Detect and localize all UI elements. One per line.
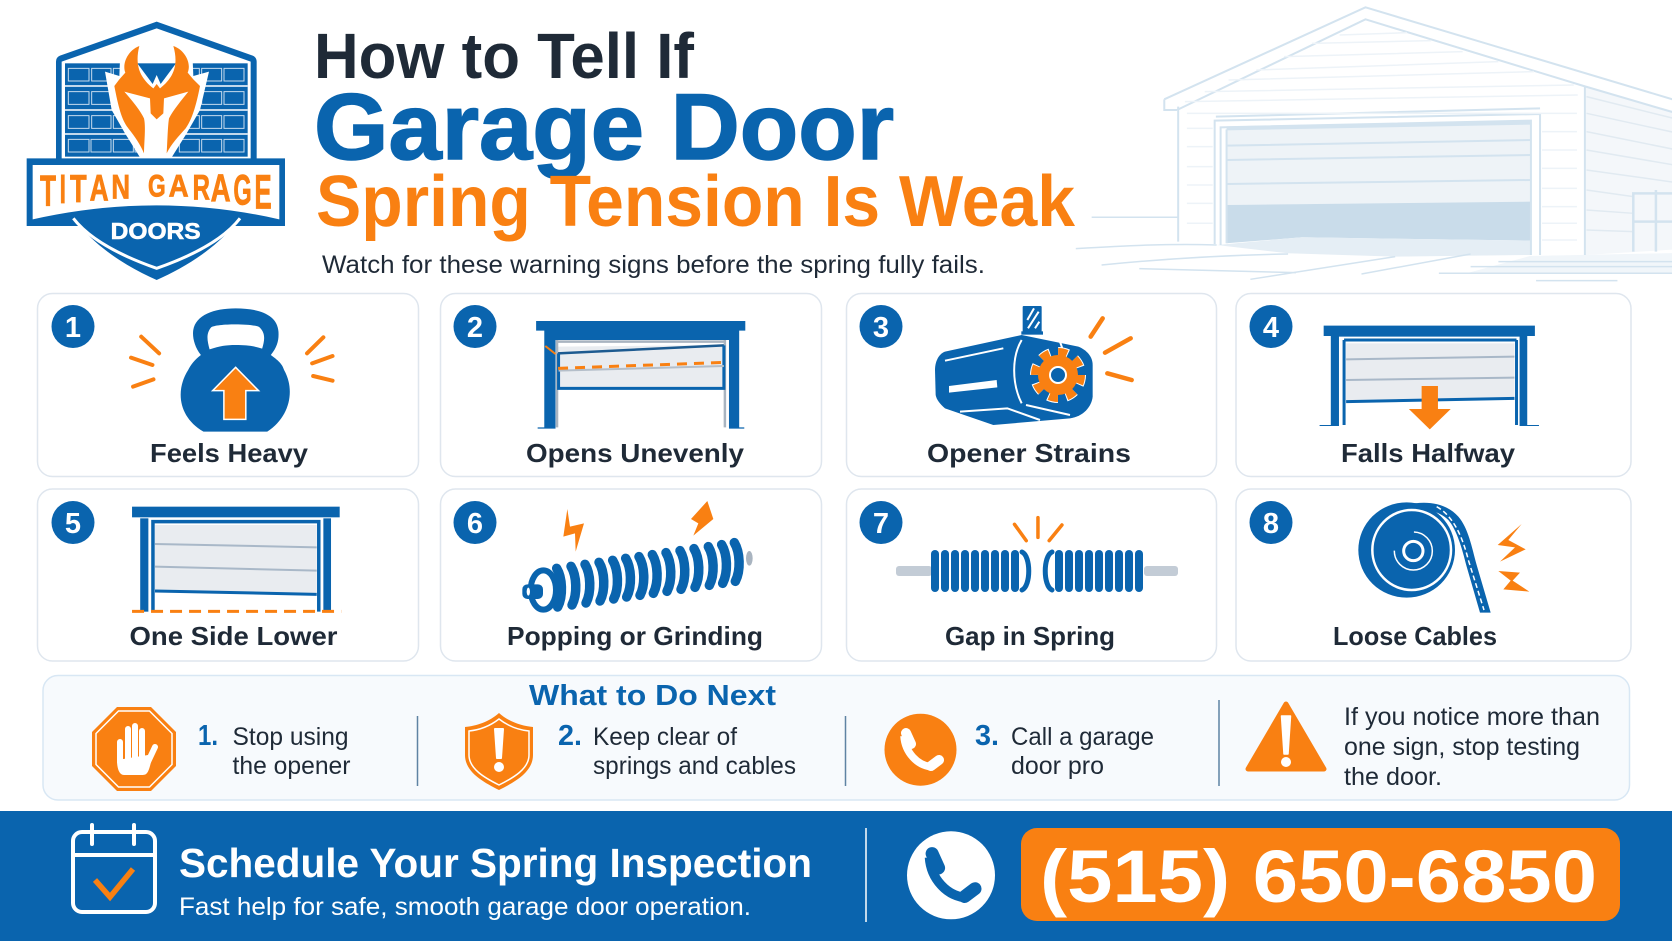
illustration: faded garage <box>1076 7 1672 281</box>
logo name: R <box>193 168 210 207</box>
step 3: door pro <box>1011 752 1104 780</box>
icon: sparks <box>563 501 713 552</box>
badge 4 <box>1250 305 1292 348</box>
icon: lopsided door <box>132 507 341 612</box>
label: Opens Unevenly <box>526 438 745 468</box>
icon: phone circle <box>907 831 995 919</box>
badge 7 <box>860 501 902 544</box>
title <box>314 20 1076 242</box>
logo name: N <box>111 169 130 207</box>
logo name: A <box>169 168 189 204</box>
label: Feels Heavy <box>150 438 309 468</box>
logo name: G <box>233 166 252 214</box>
badge 7: 7 <box>873 508 889 540</box>
icon: falling door <box>1320 326 1539 429</box>
logo name: G <box>148 168 166 204</box>
card 4: falls halfway <box>1236 294 1631 476</box>
icon: opener motor <box>935 306 1132 425</box>
icon: gear <box>1035 352 1081 398</box>
card 6: popping or grinding <box>440 489 822 661</box>
icon: break ticks <box>1014 518 1062 541</box>
badge 6: 6 <box>467 508 483 540</box>
icon: spring <box>522 543 753 610</box>
logo name <box>40 165 272 219</box>
step 2: Keep clear of <box>593 723 737 751</box>
label: Gap in Spring <box>945 621 1115 651</box>
step 1: 1. <box>198 720 218 752</box>
subtitle: Watch for these warning signs before the spring fully fails. <box>322 251 985 279</box>
logo name: E <box>254 165 272 219</box>
logo shield <box>27 22 285 280</box>
card 5: one side lower <box>38 489 418 661</box>
badge 8: 8 <box>1263 508 1279 540</box>
label: One Side Lower <box>130 621 338 651</box>
badge 3: 3 <box>873 312 889 344</box>
title line one: How to Tell If <box>314 20 695 92</box>
logo arc <box>73 218 240 268</box>
logo name: I <box>60 166 66 212</box>
badge 6 <box>454 501 496 544</box>
icon: warning triangle <box>1248 704 1324 769</box>
icon: cable drum <box>1358 502 1491 613</box>
card 1: feels heavy <box>38 294 418 476</box>
divider <box>865 828 867 922</box>
logo helmet <box>105 43 209 157</box>
step 2: springs and cables <box>593 752 796 780</box>
label: Loose Cables <box>1333 621 1497 651</box>
heading: What to Do Next <box>529 680 776 712</box>
icon: kettlebell <box>131 308 333 432</box>
logo: Titan Garage Doors <box>27 22 285 280</box>
footer banner <box>0 811 1672 941</box>
step 1 <box>198 720 350 780</box>
icon: broken spring <box>896 550 1178 592</box>
card 3: opener strains <box>846 294 1216 476</box>
warning note: the door. <box>1344 763 1442 791</box>
step 2 <box>558 720 796 780</box>
label: Opener Strains <box>927 438 1131 468</box>
icon: stop hand <box>92 707 176 791</box>
badge 3 <box>860 305 902 348</box>
step 2: 2. <box>558 720 582 752</box>
label: Falls Halfway <box>1341 438 1516 468</box>
label: Popping or Grinding <box>507 621 763 651</box>
badge 5 <box>52 501 94 544</box>
step 1: Stop using <box>232 723 348 751</box>
logo name: A <box>211 168 231 211</box>
cta heading: Schedule Your Spring Inspection <box>179 840 812 886</box>
logo banner <box>33 165 279 219</box>
badge 2 <box>454 305 496 348</box>
logo doors: DOORS <box>111 218 201 244</box>
badge 2: 2 <box>467 312 483 344</box>
logo name: T <box>70 168 87 211</box>
warning note <box>1344 703 1600 791</box>
logo name: A <box>90 167 109 208</box>
card 7: gap in spring <box>846 489 1216 661</box>
cta subtext: Fast help for safe, smooth garage door operation. <box>179 893 751 921</box>
step 3: 3. <box>975 720 999 752</box>
panel: what to do next <box>43 676 1630 800</box>
logo garage door <box>65 63 248 157</box>
title line three: Spring Tension Is Weak <box>316 162 1076 242</box>
phone number pill: (515) 650-6850 <box>1040 835 1597 918</box>
icon: uneven door <box>536 321 745 429</box>
icon: warning shield <box>465 713 533 790</box>
step 3: Call a garage <box>1011 723 1154 751</box>
step 3 <box>975 720 1154 780</box>
badge 4: 4 <box>1263 312 1279 344</box>
badge 1 <box>52 305 94 348</box>
warning note: If you notice more than <box>1344 703 1600 731</box>
card 2: opens unevenly <box>440 294 822 476</box>
badge 8 <box>1250 501 1292 544</box>
title line two: Garage Door <box>314 74 894 179</box>
badge 5: 5 <box>65 508 81 540</box>
icon: sparks <box>1498 524 1529 592</box>
logo name: T <box>40 166 56 215</box>
step 1: the opener <box>232 752 350 780</box>
badge 1: 1 <box>65 312 81 344</box>
warning note: one sign, stop testing <box>1344 733 1580 761</box>
logo shield interior <box>62 28 251 158</box>
icon: calendar <box>73 825 155 912</box>
card 8: loose cables <box>1236 489 1631 661</box>
icon: phone <box>884 714 956 786</box>
